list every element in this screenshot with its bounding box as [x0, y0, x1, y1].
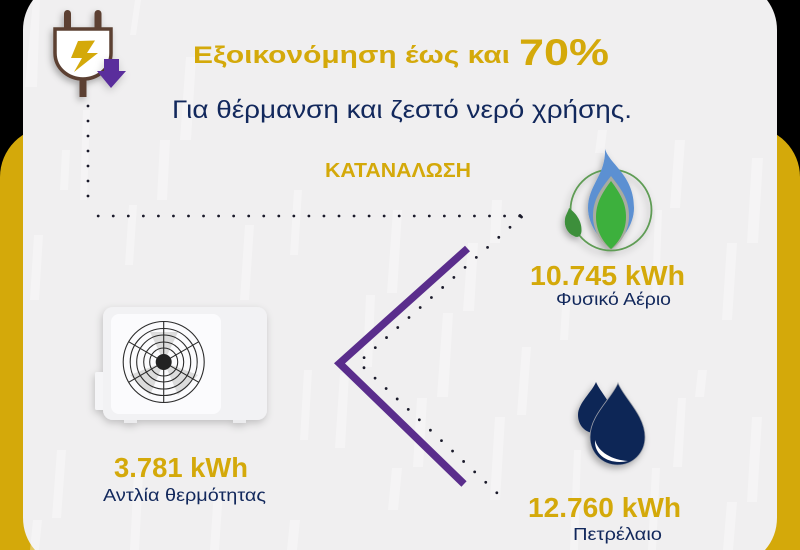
yellow backdrop: [0, 127, 800, 550]
heading: consumption: ΚΑΤΑΝΑΛΩΣΗ: [325, 160, 471, 182]
label: heat pump: Αντλία θερμότητας: [103, 485, 266, 505]
subtitle: Για θέρμανση και ζεστό νερό χρήσης.: [172, 96, 632, 124]
purple chevron: [340, 248, 468, 484]
icon: oil drops: [578, 382, 645, 465]
label: natural gas: Φυσικό Αέριο: [556, 289, 671, 309]
value: oil: 12.760 kWh: [528, 492, 681, 523]
value: natural gas: 10.745 kWh: [530, 260, 685, 291]
value: heat pump: 3.781 kWh: [114, 452, 248, 483]
icon: heat pump outdoor unit: [95, 307, 267, 423]
dotted connector lines: [88, 106, 522, 502]
icon: natural gas flame and leaf: [565, 149, 652, 250]
title: [193, 32, 609, 73]
icon: electric plug: [55, 10, 126, 97]
title: Εξοικονόμηση έως και: [193, 42, 510, 69]
title: 70%: [519, 32, 609, 73]
label: oil: Πετρέλαιο: [573, 524, 662, 544]
